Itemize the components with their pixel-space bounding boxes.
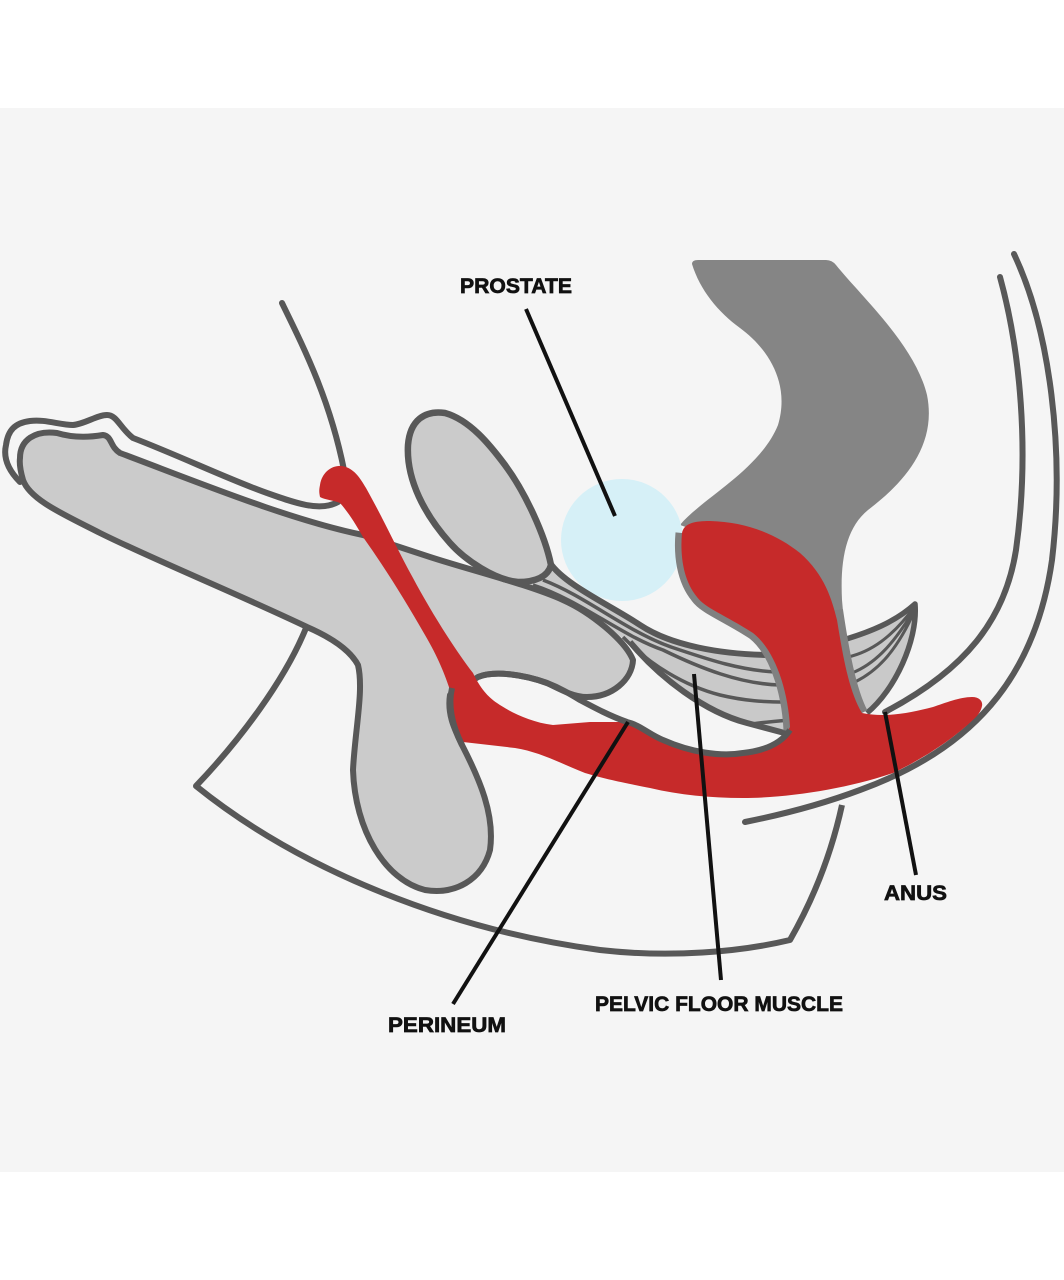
rectum: [680, 260, 929, 690]
foreskin outline: [5, 415, 338, 506]
pubic bone: [408, 412, 551, 582]
leader line: anus: [885, 712, 916, 875]
leader line: pelvic floor muscle: [694, 674, 721, 980]
leader line: perineum: [453, 722, 628, 1004]
body outline front: [282, 303, 344, 470]
leader line: prostate: [526, 309, 615, 516]
label: anus: ANUS: [884, 882, 947, 905]
label: perineum: PERINEUM: [388, 1014, 506, 1037]
back outline outer: [745, 254, 1057, 822]
back outline inner: [885, 277, 1023, 712]
penis and bulb: [20, 432, 633, 891]
label: pelvic floor muscle: PELVIC FLOOR MUSCLE: [595, 993, 843, 1016]
prostate: [561, 479, 683, 601]
label: prostate: PROSTATE: [460, 275, 572, 298]
body edge beside red: [450, 688, 462, 745]
red muscle: [319, 466, 982, 798]
pelvic floor muscle: [530, 563, 915, 735]
gap outline over red: [478, 674, 790, 754]
body outline lower: [196, 628, 842, 954]
rectum shadow edge: [681, 533, 862, 730]
